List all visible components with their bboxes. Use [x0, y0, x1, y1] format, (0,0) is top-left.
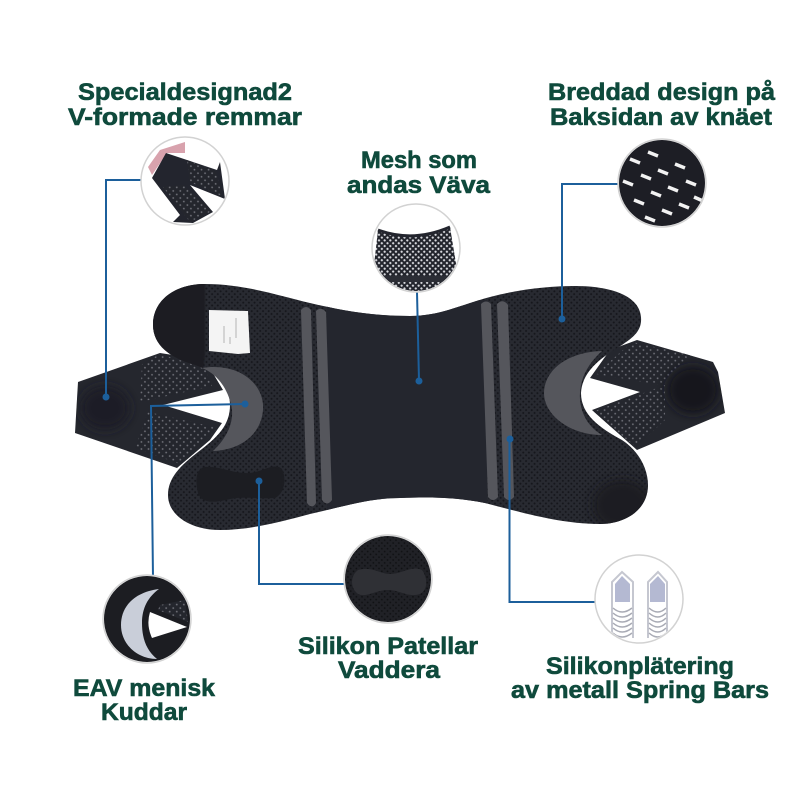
heading: EAV meniscus — [73, 675, 216, 726]
icon: widened back mesh circle — [618, 139, 706, 227]
knee brace product — [70, 275, 730, 535]
icon: patella pad circle — [344, 535, 432, 623]
care label — [209, 310, 250, 354]
heading: widened design: Baksidan av knäet — [550, 104, 772, 131]
heading: EAV meniscus: Kuddar — [101, 699, 187, 726]
heading: spring bars: av metall Spring Bars — [511, 677, 769, 704]
line: EAV meniscus — [151, 402, 248, 578]
heading: V straps — [68, 79, 302, 131]
left V straps — [75, 353, 223, 468]
heading: widened design — [548, 79, 776, 131]
heading: mesh: andas Väva — [347, 172, 491, 199]
right meniscus crescent — [544, 351, 602, 435]
heading: patella pad — [298, 633, 478, 684]
spring bars — [301, 301, 514, 506]
icon: V strap detail circle — [141, 137, 229, 225]
heading: patella pad: Silikon Patellar — [298, 633, 478, 660]
heading: spring bars: Silikonplätering — [546, 653, 734, 680]
heading: V straps: V-formade remmar — [68, 104, 302, 131]
line: widened design — [560, 184, 618, 322]
heading: EAV meniscus: EAV menisk — [73, 675, 216, 702]
right V straps — [590, 340, 725, 450]
icon: mesh detail circle — [370, 204, 462, 300]
heading: spring bars — [511, 653, 769, 704]
heading: widened design: Breddad design på — [548, 79, 776, 106]
brace body — [145, 275, 652, 535]
heading: patella pad: Vaddera — [338, 657, 441, 684]
silicone patella pad — [196, 467, 284, 502]
line: mesh — [416, 292, 422, 384]
callout lines and markers — [104, 180, 618, 602]
heading: mesh: Mesh som — [361, 147, 477, 174]
icon: EAV meniscus pad circle — [103, 575, 191, 663]
left meniscus crescent — [202, 367, 263, 451]
heading: V straps: Specialdesignad2 — [78, 79, 292, 106]
line: patella pad — [256, 478, 344, 584]
heading: mesh — [347, 147, 491, 199]
line: spring bars — [508, 436, 595, 602]
line: V straps — [104, 180, 141, 400]
icon: silicone spring bars circle — [595, 555, 683, 643]
